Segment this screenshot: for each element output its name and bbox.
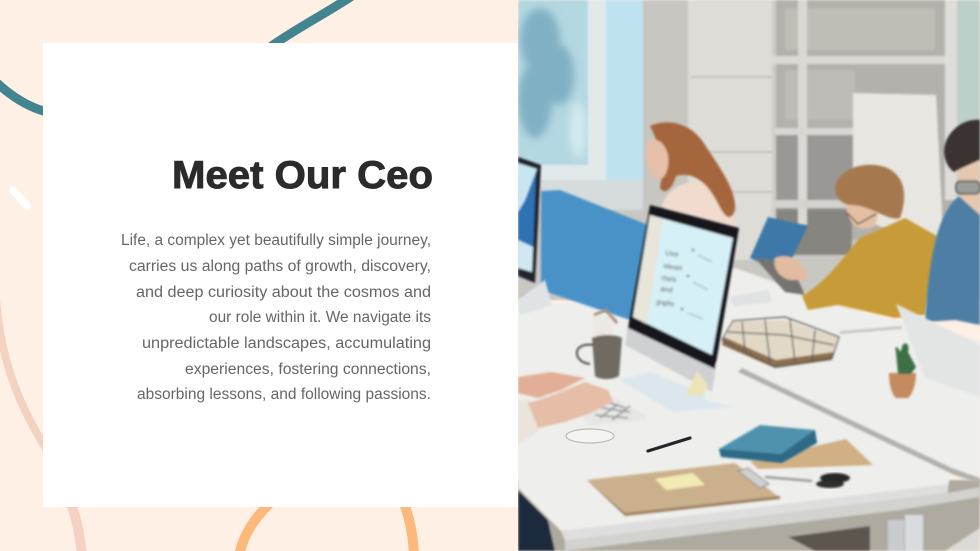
main monitor: Use xyxy=(665,248,679,259)
heading: Meet Our Ceo xyxy=(172,154,433,197)
main monitor: charts xyxy=(661,273,677,284)
photo background: walls and window xyxy=(518,0,980,300)
hands at keyboard xyxy=(518,372,646,445)
floor and under-desk area xyxy=(518,480,980,551)
pen xyxy=(648,438,690,451)
scissors xyxy=(765,473,850,488)
body text block: experiences, fostering connections, xyxy=(185,361,431,378)
woman with curly hair xyxy=(646,122,737,240)
blue desk divider xyxy=(541,190,648,325)
body text block: and deep curiosity about the cosmos and xyxy=(136,284,431,301)
background panel: cream xyxy=(0,0,518,551)
panel: white text card xyxy=(43,43,518,507)
body text block: our role within it. We navigate its xyxy=(209,309,431,326)
main monitor: relevant xyxy=(663,261,683,273)
body text block: unpredictable landscapes, accumulating xyxy=(142,335,431,352)
tan notebook xyxy=(750,439,873,469)
man with glasses in blue shirt xyxy=(925,120,980,325)
left monitor xyxy=(518,157,552,315)
boy in yellow hoodie xyxy=(750,165,937,318)
clipboard with sticky note xyxy=(587,463,780,516)
main monitor: and xyxy=(660,284,673,295)
blue notebook xyxy=(719,425,817,463)
body text block: Life, a complex yet beautifully simple journey, xyxy=(121,232,431,249)
main monitor: graphs xyxy=(656,297,675,309)
main monitor xyxy=(620,205,739,412)
desks xyxy=(518,268,980,551)
body text block: carries us along paths of growth, discovery, xyxy=(129,258,431,275)
potted cactus xyxy=(889,343,916,398)
coffee mug and plant holder xyxy=(577,310,622,379)
laptop on right xyxy=(896,304,980,397)
computer mouse xyxy=(566,429,614,443)
body text block: absorbing lessons, and following passions. xyxy=(137,386,431,403)
decorative curved lines xyxy=(0,0,414,551)
wire basket tray xyxy=(722,317,839,368)
photo: office team working at desks xyxy=(518,0,980,551)
body text block xyxy=(121,232,431,403)
